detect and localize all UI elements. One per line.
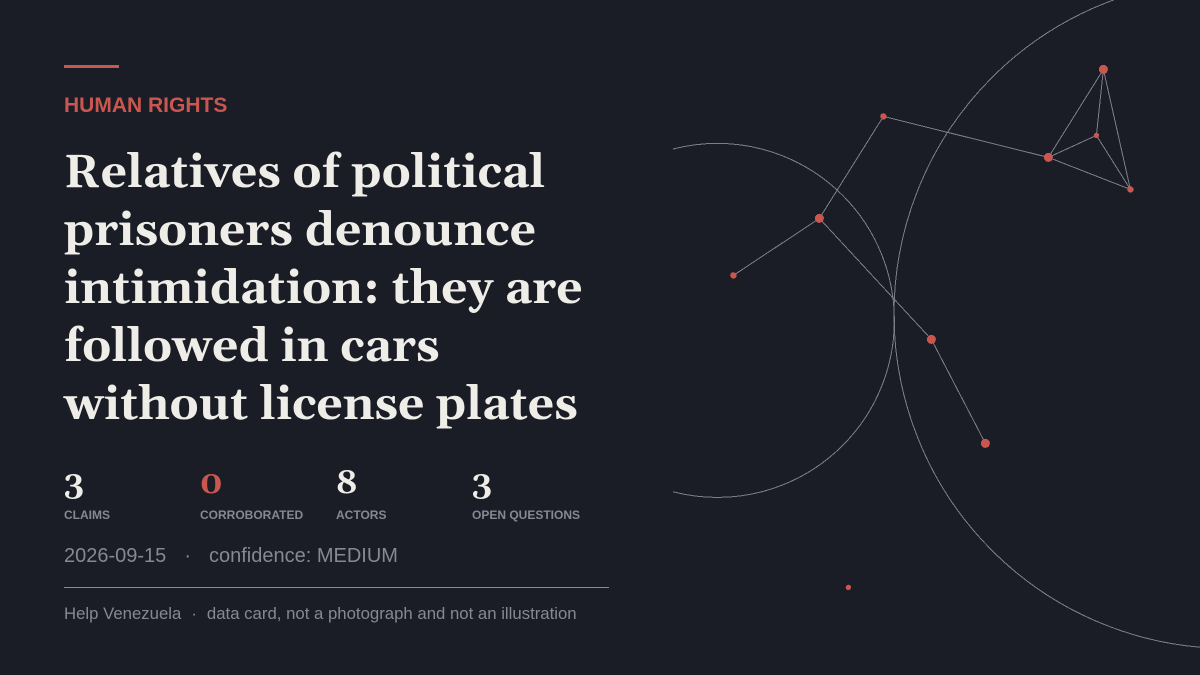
stat: claims: CLAIMS	[64, 508, 110, 522]
stat: claims	[64, 463, 110, 522]
stat: actors	[336, 463, 386, 522]
category label: HUMAN RIGHTS	[64, 94, 227, 117]
stat: open questions: 3	[472, 463, 492, 504]
accent bar	[64, 65, 119, 68]
network nodes	[730, 65, 1134, 590]
title: Relatives of political	[64, 144, 545, 203]
title: prisoners denounce	[64, 202, 536, 261]
stat: open questions	[472, 463, 580, 522]
orbit circles	[540, 0, 1200, 648]
title	[63, 144, 583, 435]
stat: corroborated	[200, 463, 303, 522]
title: without license plates	[64, 376, 578, 435]
stat: open questions: OPEN QUESTIONS	[472, 508, 580, 522]
date and confidence: 2026-09-15 · confidence: MEDIUM	[64, 545, 398, 567]
stat: claims: 3	[64, 463, 84, 504]
stat: actors: ACTORS	[336, 508, 386, 522]
title: intimidation: they are	[64, 260, 583, 319]
stat: actors: 8	[336, 463, 358, 504]
title: followed in cars	[64, 318, 439, 377]
divider	[64, 587, 609, 588]
network graphic	[673, 0, 1200, 648]
connecting lines	[733, 69, 1130, 443]
footer: Help Venezuela · data card, not a photograph and not an illustration	[64, 604, 577, 623]
stat: corroborated: CORROBORATED	[200, 508, 303, 522]
stat: corroborated: 0	[200, 463, 222, 504]
